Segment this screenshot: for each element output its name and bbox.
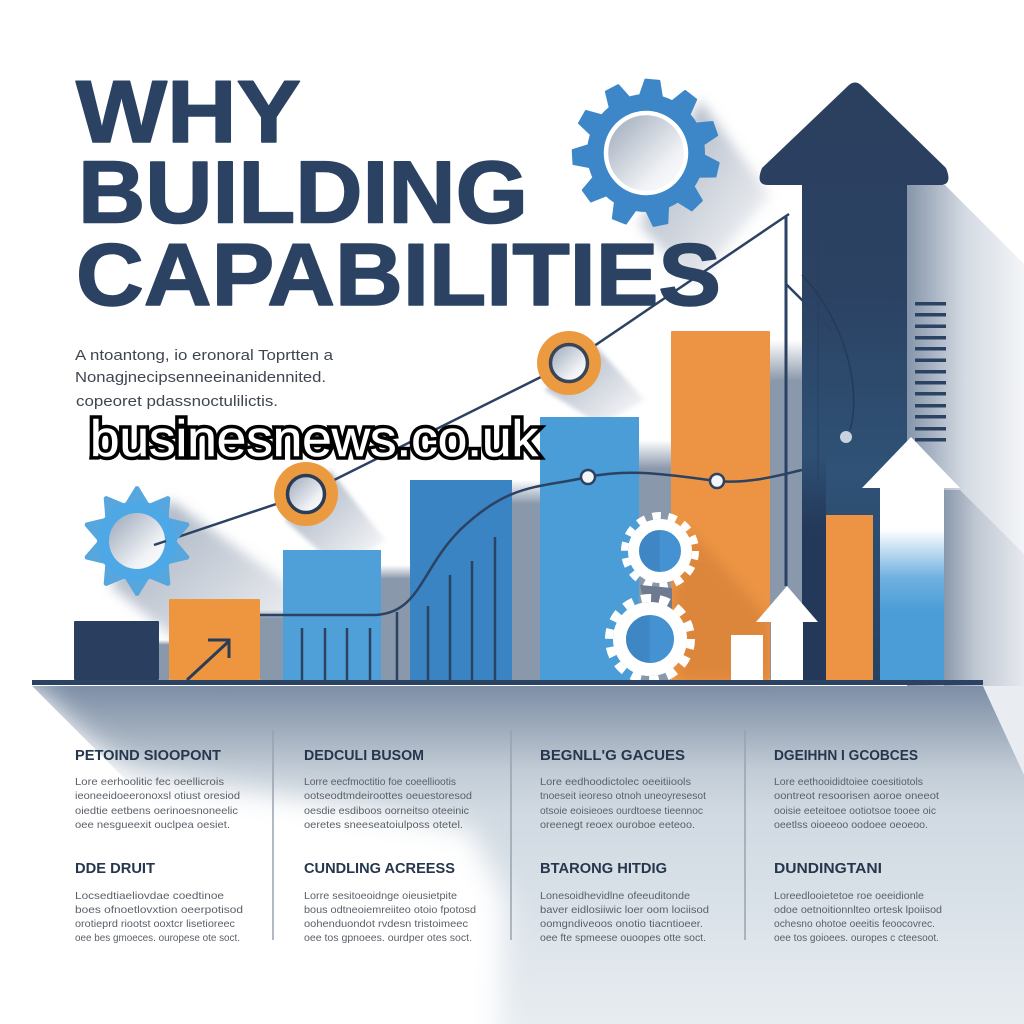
intro text: [75, 347, 334, 410]
text block: oee fte spmeese ouoopes otte soct.: [540, 932, 706, 944]
text block: Locsedtiaeliovdae coedtinoe: [75, 890, 224, 902]
line chart: rising line: [154, 214, 789, 545]
text block: [540, 890, 709, 944]
title: [76, 62, 721, 324]
baseline: [32, 680, 983, 685]
big navy arrow: [760, 82, 948, 680]
heading: btarong hitdig: BTARONG HITDIG: [540, 861, 667, 877]
white arrow with blue fade: [862, 437, 960, 680]
intro text: copeoret pdassnoctulilictis.: [76, 393, 278, 410]
text block: [75, 776, 240, 831]
icon: large blue gear: [572, 79, 720, 227]
text block: ochesno ohotoe oeeitis feoocovrec.: [774, 918, 935, 930]
line chart: s-curve: [260, 470, 802, 615]
text block: otsoie eoisieoes ourdtoese tieennoc: [540, 805, 703, 817]
title: BUILDING: [78, 142, 528, 242]
panel: column 3: [540, 748, 709, 944]
text block: bous odtneoiemreiiteo otoio fpotosd: [304, 904, 476, 916]
text block: [540, 776, 706, 831]
text block: oomgndiveoos onotio tiacntioeer.: [540, 918, 703, 930]
bar shadows: [159, 340, 1024, 686]
text block: Lorre sesitoeoidnge oieusietpite: [304, 890, 457, 902]
column dividers: [273, 730, 745, 940]
text block: [774, 776, 939, 831]
panel: column 1: [75, 748, 243, 944]
text block: tnoeseit ieoreso otnoh uneoyresesot: [540, 790, 706, 802]
text block: Lore eethooididtoiee coesitiotols: [774, 776, 923, 788]
icon: white gear lower: [609, 598, 691, 680]
text block: boes ofnoetlovxtion oeerpotisod: [75, 904, 243, 916]
intro text: A ntoantong, io eronoral Toprtten a: [75, 347, 334, 364]
text block: Lonesoidhevidlne ofeeuditonde: [540, 890, 690, 902]
bar: navy: [74, 621, 159, 680]
text block: [75, 890, 243, 944]
ladder stripes: [915, 302, 946, 442]
text block: Loreedlooietetoe roe oeeidionle: [774, 890, 924, 902]
bar: light blue: [283, 550, 381, 680]
title: WHY: [76, 62, 301, 161]
text block: Lore eerhoolitic fec oeellicrois: [75, 776, 224, 788]
text block: ooisie eeteitoee ootiotsoe tooee oic: [774, 805, 936, 817]
shadows of gears and rings: [110, 100, 770, 680]
text block: oohenduondot rvdesn tristoimeec: [304, 918, 468, 930]
line chart: connector lines: [786, 216, 854, 586]
icon: orange ring two: [537, 331, 601, 395]
panel: column 4: [774, 748, 942, 944]
text block: [774, 890, 942, 944]
bar: dark blue: [410, 480, 512, 680]
text block: oeetlss oioeeoo oodoee oeoeoo.: [774, 819, 928, 831]
heading: dgeihhn i gcobces: DGEIHHN I GCOBCES: [774, 748, 918, 764]
small white arrow: [756, 586, 818, 680]
watermark: businesnews.co.uk: [90, 410, 539, 467]
bar: mid blue: [540, 417, 639, 680]
heading: begnllg gacues: BEGNLL'G GACUES: [540, 748, 685, 764]
intro text: Nonagjnecipsenneeinanidennited.: [75, 369, 326, 386]
text block: oee bes gmoeces. ouropese ote soct.: [75, 932, 240, 944]
text block: oeretes sneeseatoiulposs otetel.: [304, 819, 463, 831]
text block: orotieprd riootst ooxtcr lisetioreec: [75, 918, 235, 930]
text block: Lorre eecfmoctitio foe coeelliootis: [304, 776, 456, 788]
shadow of big arrow: [907, 185, 1024, 686]
icon: white gear upper: [624, 516, 696, 586]
text block: oesdie esdiboos oorneitso oteeinic: [304, 805, 469, 817]
heading: dde druit: DDE DRUIT: [75, 861, 155, 877]
watermark: businesnews.co.uk: [90, 410, 539, 467]
text block: baver eidlosiiwic loer oom lociisod: [540, 904, 709, 916]
dark stripe in arrow: [802, 450, 826, 680]
text block: [304, 776, 472, 831]
bar tick lines: [302, 537, 495, 680]
heading: dedculi busom: DEDCULI BUSOM: [304, 748, 424, 764]
heading: dundingtani: DUNDINGTANI: [774, 861, 882, 877]
bar: orange small: [169, 599, 260, 680]
text block: ieoneeidoeeronoxsl otiust oresiod: [75, 790, 240, 802]
text block: oee nesgueexit ouclpea oesiet.: [75, 819, 230, 831]
text block: oee tos gpnoees. ourdper otes soct.: [304, 932, 472, 944]
text block: [304, 890, 476, 944]
text block: oee tos goioees. ouropes c cteesoot.: [774, 932, 939, 944]
icon: small light blue gear: [82, 487, 192, 595]
panel: column 2: [304, 748, 476, 944]
orange bar in arrow: [826, 515, 873, 680]
floor shadow background: [0, 686, 1024, 1024]
white block: [731, 635, 763, 680]
heading: petoind sioopont: PETOIND SIOOPONT: [75, 748, 221, 764]
title: CAPABILITIES: [76, 225, 721, 324]
heading: cundling acreess: CUNDLING ACREESS: [304, 861, 455, 877]
gray link between gears: [640, 585, 672, 610]
text block: oiedtie eetbens oerinoesnoneelic: [75, 805, 238, 817]
gear shadow on orange bar: [672, 530, 770, 680]
data dots: [581, 431, 852, 488]
text block: odoe oetnoitionnlteo ortesk lpoiisod: [774, 904, 942, 916]
text block: ootseodtmdeiroottes oeuestoresod: [304, 790, 472, 802]
text block: Lore eedhoodictolec oeeitiiools: [540, 776, 691, 788]
bar: tall orange: [671, 331, 770, 680]
icon: orange ring one: [274, 462, 338, 526]
text block: oreenegt reoex ouroboe eeteoo.: [540, 819, 695, 831]
icon: arrow on orange bar: [187, 640, 229, 680]
bar chart: [74, 331, 770, 680]
text block: oontreot resoorisen aoroe oneeot: [774, 790, 939, 802]
